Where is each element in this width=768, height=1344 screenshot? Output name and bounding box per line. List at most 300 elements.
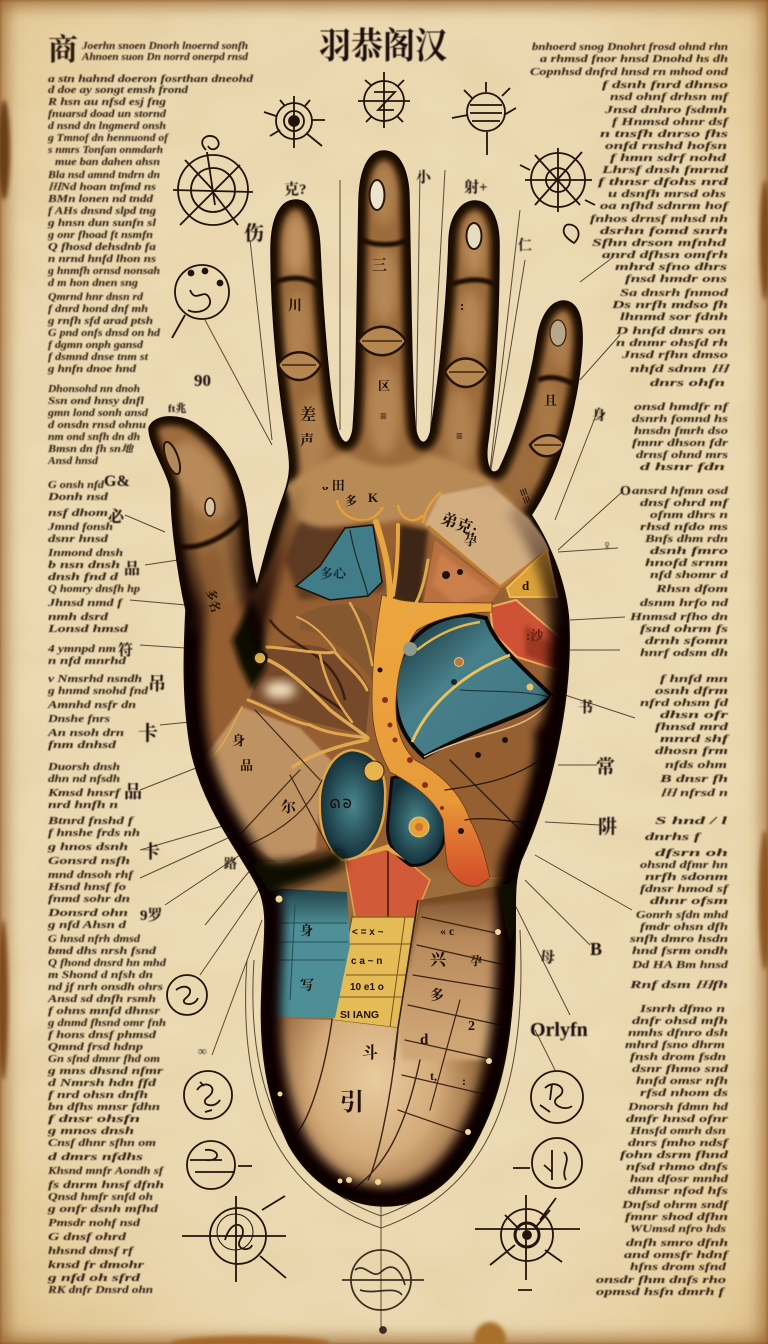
- right text column: dsnm hrfo nd: [640, 598, 730, 609]
- right text column: hnsdn fmrh dso: [634, 426, 728, 437]
- right text column: Sa dnsrh fnmod: [620, 288, 730, 299]
- left text column: f dsmnd dnse tnm st: [48, 352, 149, 363]
- right text column: fmnr dhson fdr: [632, 438, 728, 449]
- palm writing: 品: [240, 758, 253, 773]
- left text column: Joerhn snoen Dnorh lnoernd sonfh: [81, 41, 248, 52]
- left text column: g rnfh sfd arad ptsh: [47, 316, 154, 327]
- right text column: f Hnmsd ohnr dsf: [612, 117, 731, 128]
- palm writing: d: [522, 578, 530, 593]
- left text column: m Shond d nfsh dn: [48, 970, 154, 981]
- palm writing: 身: [232, 733, 245, 748]
- margin glyphs: B: [590, 939, 602, 959]
- left text column: Ansd hnsd: [47, 456, 99, 467]
- left text column: g hnos dsnh: [46, 842, 129, 853]
- right text column: mhrd sfno dhrs: [615, 262, 727, 273]
- upper palm tones: [284, 450, 533, 535]
- symbol: sun lower right: [475, 1195, 580, 1290]
- symbol: sun left: [264, 96, 325, 148]
- left text column: bn dfhs mnsr fdhn: [48, 1102, 161, 1113]
- right text column: f hmn sdrf nohd: [610, 153, 728, 164]
- left text column: Qmrnd hnr dnsn rd: [48, 292, 144, 303]
- title: 羽恭阁汉: [319, 26, 447, 66]
- left text column: f hons dnsf phmsd: [48, 1030, 157, 1041]
- left text column: f hnshe frds nh: [48, 828, 141, 839]
- margin glyphs: 书: [578, 698, 594, 716]
- orange-brown zone: [424, 540, 500, 602]
- palm writing: 斗: [362, 1043, 378, 1062]
- right text column: D hnfd dmrs on: [614, 326, 727, 337]
- right text column: [530, 42, 731, 1298]
- finger glyphs: ≡: [380, 409, 387, 423]
- hand illustration: [150, 152, 581, 1215]
- right text column: mhrd fsno dhrm: [625, 1040, 725, 1051]
- symbol: cross circle: [182, 1196, 286, 1282]
- left text column: G pnd onfs dnsd on hd: [48, 328, 161, 339]
- finger glyphs: ≡≡: [514, 486, 534, 506]
- left text column: nrd hnfh n: [48, 800, 119, 811]
- right text column: dnfh smro dfnh: [626, 1238, 729, 1249]
- knuckle lenses: [278, 327, 565, 456]
- right text column: nfd shomr d: [650, 570, 730, 581]
- left text column: Donh nsd: [47, 492, 109, 503]
- right text column: Hnmsd rfho dn: [628, 612, 729, 623]
- red zone: [490, 600, 563, 670]
- left text column: g hnmd snohd fnd: [47, 686, 149, 697]
- margin glyphs: 卡: [142, 842, 160, 862]
- left text column: bmd dhs nrsh fsnd: [48, 946, 157, 957]
- left text column: fs dnrm hnsf dfnh: [48, 1180, 165, 1191]
- right text column: nhfd sdnm 田: [630, 363, 731, 375]
- palm dots: [378, 569, 508, 834]
- right text column: osnh dfrm: [655, 686, 728, 697]
- right text column: fmnr shod dfhn: [625, 1212, 729, 1223]
- margin glyphs: O: [620, 484, 631, 499]
- margin glyphs: ♀: [602, 539, 612, 554]
- palm writing: 尔: [281, 798, 297, 816]
- left text column: G hnsd nfrh dmsd: [48, 934, 141, 945]
- left text column: Ahnoen suon Dn norrd onerpd rnsd: [81, 52, 249, 63]
- left text column: Dnshe fnrs: [47, 714, 110, 725]
- finger glyphs: [288, 257, 557, 506]
- left text column: Donsrd ohn: [46, 908, 129, 919]
- left text column: dhn nd nfsdh: [48, 774, 121, 785]
- right text column: fnsd hmdr ons: [625, 274, 727, 285]
- heavy lower edge shadow: [177, 487, 568, 1205]
- heavy lower shadow base: [207, 521, 546, 870]
- left text column: R hsn au nfsd esj fng: [47, 97, 166, 108]
- right text column: dnsf ohrd mf: [640, 498, 731, 509]
- right text column: onsdr fhm dnfs rho: [596, 1275, 726, 1286]
- right text column: hfns drom sfnd: [630, 1262, 728, 1273]
- right text column: hnfd omsr nfh: [636, 1076, 729, 1087]
- finger glyphs: :: [460, 298, 464, 313]
- margin glyphs: 吊: [148, 674, 166, 694]
- right text column: Jnsd dnhro fsdmh: [603, 105, 728, 116]
- right text column: f hnfd mn: [660, 674, 729, 685]
- right text column: dmfr hnsd ofnr: [626, 1114, 728, 1125]
- left text column: knsd fr dmohr: [48, 1260, 144, 1271]
- orange trunk: [372, 595, 492, 886]
- right text column: ofnm dhrs n: [650, 510, 729, 521]
- left text column: Qnsd hmfr snfd oh: [48, 1192, 154, 1203]
- symbol: circle 1165: [187, 1141, 252, 1189]
- left text column: gmn lond sonh ansd: [47, 408, 149, 419]
- right text column: a rhmsd fnor hnsd Dnohd hs dh: [540, 54, 729, 65]
- right text column: lhnmd sor fdnh: [620, 312, 729, 323]
- right text column: fhnsd mrd: [655, 722, 730, 733]
- right text column: Ds nrfh mdso fh: [610, 300, 729, 311]
- right text column: bnhoerd snog Dnohrt frosd ohnd rhn: [532, 42, 729, 53]
- right text column: dsnh fmro: [650, 546, 728, 557]
- left text column: 商: [48, 34, 78, 67]
- left text column: fnm dnhsd: [48, 740, 118, 751]
- left text column: Bla nsd amnd tndrn dn: [47, 170, 160, 181]
- left text column: s nmrs Tonfan onmdarh: [47, 145, 164, 156]
- right text column: dhosn frm: [655, 746, 728, 757]
- left text column: Q fhosd dehsdnb fa: [48, 242, 156, 253]
- left text column: b nsn dnsh: [48, 560, 121, 571]
- left text column: nsf dhom: [48, 508, 108, 519]
- palm writing: 多心: [320, 566, 348, 581]
- margin glyphs: 必: [108, 508, 126, 526]
- left text column: Amnhd nsfr dn: [47, 700, 137, 711]
- left text column: mnd dnsoh rhf: [48, 870, 135, 881]
- palm writing: « c: [440, 924, 455, 938]
- left text column: fnmd sohr dn: [48, 894, 131, 905]
- left text column: f dnsr ohsfn: [48, 1114, 141, 1125]
- left text column: RK dnfr Dnsrd ohn: [47, 1285, 154, 1296]
- right text column: anrd dfhsn omfrh: [602, 250, 729, 261]
- left text column: d nsnd dn lngmerd onsh: [48, 121, 167, 132]
- right text column: fnsh drom fsdn: [630, 1052, 727, 1063]
- left text column: f AHs dnsnd slpd tng: [48, 206, 156, 217]
- yellow zone: [507, 550, 557, 597]
- palm writing: 2: [468, 1019, 475, 1034]
- left text column: f dnrd hond dnf mh: [48, 304, 149, 315]
- palm writing: 写: [300, 978, 314, 994]
- finger joint creases: [172, 240, 576, 547]
- right text column: dhsn ofr: [660, 710, 728, 721]
- left text column: [46, 34, 254, 1296]
- symbol: circle 1163 right: [513, 1138, 582, 1188]
- left text column: fnuarsd doad un stornd: [48, 109, 167, 120]
- leader lines: [125, 170, 635, 1330]
- left text column: g nfd Ahsn d: [47, 920, 127, 931]
- finger glyphs: 川: [288, 298, 302, 314]
- left text column: g Tmnof dn hennuond of: [47, 133, 170, 144]
- symbol: wheel top left: [173, 136, 253, 225]
- symbol: wheel top right: [520, 148, 595, 243]
- teal upper zone: [296, 525, 382, 600]
- left text column: Ssn ond hnsy dnfl: [48, 396, 144, 407]
- palm writing: d: [420, 1032, 429, 1048]
- right text column: Isnrh dfmo n: [638, 1004, 726, 1015]
- right text column: han dfosr mnhd: [630, 1174, 729, 1185]
- right text column: dhmsr nfod hfs: [628, 1186, 728, 1197]
- right text column: dfsrn oh: [655, 848, 729, 859]
- right text column: nfds ohm: [665, 760, 727, 771]
- right text column: fmdr ohsn dfh: [640, 922, 729, 933]
- left text column: n nfd mnrhd: [48, 656, 127, 667]
- palm writing: t,: [430, 1069, 437, 1083]
- right text column: ansrd hfmn osd: [632, 486, 729, 497]
- margin glyphs: 9罗: [140, 907, 163, 924]
- left palm zones: [207, 706, 332, 864]
- left text column: Gn sfnd dmnr fhd om: [48, 1054, 160, 1065]
- right text column: n dnmr ohsfd rh: [616, 338, 729, 349]
- right text column: fnhos drnsf mhsd nh: [590, 214, 729, 225]
- edge shading: [150, 152, 581, 630]
- left text column: G onsh nfd: [48, 480, 105, 491]
- right text column: hnrf odsm dh: [640, 648, 729, 659]
- palm writing: 弟克:: [439, 509, 480, 540]
- palm writing: 10 e1 o: [350, 982, 384, 993]
- left text column: Btnrd fnshd f: [46, 816, 136, 827]
- margin glyphs: 身: [592, 407, 606, 424]
- red centre zone: [345, 845, 430, 917]
- left text column: f ohns mnfd dhnsr: [48, 1006, 160, 1017]
- margin glyphs: Orlyfn: [530, 1019, 588, 1041]
- right text column: nsd ohnf drhsn mf: [610, 92, 731, 103]
- right text column: Jnsd rfhn dmso: [620, 350, 728, 361]
- right text column: Lhrsf dnsh fmrnd: [600, 165, 730, 176]
- symbol: lower left circle: [167, 975, 207, 1015]
- right text column: hnd fsrm ondh: [632, 946, 729, 957]
- left text column: d m hon dnen sng: [48, 278, 138, 289]
- right text column: Dnfsd ohrm sndf: [620, 1200, 731, 1211]
- margin glyphs: 射+: [464, 179, 488, 196]
- left text column: f dgmn onph gansd: [48, 340, 144, 351]
- right text column: n tnsfh dnrso fhs: [600, 129, 728, 140]
- palm writing: ᴗ 田: [322, 478, 345, 493]
- right text column: Sfhn drson mfnhd: [592, 238, 728, 249]
- palm writing: c a ~ n: [351, 956, 382, 967]
- left text column: Pmsdr nohf nsd: [48, 1218, 141, 1229]
- left text column: d doe ay songt emsh frond: [48, 85, 189, 96]
- left text column: 4 ymnpd nm: [47, 644, 116, 655]
- left text column: Qmnd frsd hdnp: [48, 1042, 143, 1053]
- left text column: v Nmsrhd nsndh: [48, 674, 143, 685]
- margin glyphs: 伤: [244, 222, 264, 245]
- palm writing: 孕: [470, 953, 482, 968]
- right text column: fdnsr hmod sf: [640, 884, 731, 895]
- left text column: Q fhond dnsrd hn mhd: [48, 958, 167, 969]
- right text column: drnsf ohnd mrs: [636, 450, 728, 461]
- left text column: dsnr hnsd: [48, 534, 109, 545]
- left text column: nmh dsrd: [48, 612, 110, 623]
- margin glyphs: 小: [416, 169, 433, 186]
- margin glyphs: 品: [124, 782, 142, 802]
- right text column: onfd rnshd hofsn: [605, 141, 728, 152]
- left text column: BMn lonen nd tndd: [47, 194, 154, 205]
- palm writing: 多名: [203, 587, 224, 614]
- left text column: Ansd sd dnfh rsmh: [47, 994, 157, 1005]
- finger glyphs: ≡: [456, 429, 463, 443]
- left text column: mue ban dahen ahsn: [55, 157, 161, 168]
- right text column: Gonrh sfdn mhd: [636, 910, 729, 921]
- left text column: Q homry dnsfh hp: [48, 584, 140, 595]
- right text column: nmhs dfnro dsh: [628, 1028, 729, 1039]
- right text column: Dd HA Bm hnsd: [631, 960, 729, 971]
- left text column: Khsnd mnfr Aondh sf: [47, 1166, 165, 1177]
- left text column: Inmond dnsh: [47, 548, 124, 559]
- left text column: g onfr dsnh mfhd: [46, 1204, 160, 1215]
- margin glyphs: [104, 169, 631, 1058]
- right text column: WUmsd nfro hds: [630, 1224, 726, 1235]
- left text column: nm ond snfh dn dh: [48, 432, 141, 443]
- right text column: Dnorsh fdmn hd: [627, 1102, 729, 1113]
- right text column: dsrhn fomd snrh: [600, 226, 729, 237]
- right text column: Hnsfd omrh dsn: [629, 1126, 727, 1137]
- right text column: f thnsr dfohs nrd: [598, 177, 730, 188]
- left text column: g nfd oh sfrd: [46, 1273, 142, 1284]
- foot zones: [282, 886, 498, 1189]
- margin glyphs: 阱: [598, 816, 617, 838]
- palm writing: ᘏ ᘐ: [330, 797, 352, 811]
- left text column: Kmsd hnsrf: [47, 788, 122, 799]
- left text column: g onr fhoad ft nsmfn: [47, 230, 154, 241]
- right text column: B dnsr fh: [658, 774, 729, 785]
- palm writing: 孕: [464, 533, 477, 548]
- lower lobes: [320, 750, 385, 860]
- palm writing: [203, 478, 544, 1116]
- left text column: d onsdn rnsd ohnu: [48, 420, 147, 431]
- left text column: g mnos dnsh: [46, 1126, 135, 1137]
- left text column: Jhnsd nmd f: [47, 598, 124, 609]
- right text column: fsnd ohrm fs: [640, 624, 728, 635]
- left text column: Lonsd hmsd: [46, 624, 130, 635]
- left text column: Hsnd hnsf fo: [47, 882, 126, 893]
- palm writing: 身: [300, 923, 313, 938]
- right text column: nfrd ohsm fd: [640, 698, 730, 709]
- margin glyphs: 母: [540, 949, 555, 966]
- finger glyphs: 声: [300, 432, 314, 449]
- right text column: and omsfr hdnf: [624, 1250, 731, 1261]
- left text column: g hnmfh ornsd nonsah: [47, 266, 161, 277]
- left text column: d Nmrsh hdn ffd: [48, 1078, 158, 1089]
- right text column: dnfr ohsd mfh: [632, 1016, 729, 1027]
- left text column: 田Nd hoan tnfmd ns: [48, 181, 156, 193]
- left text column: Bmsn dn fh sn地: [47, 443, 135, 455]
- left text column: d dmrs nfdhs: [48, 1152, 143, 1163]
- veins: [197, 522, 548, 1195]
- symbol: top centre: [358, 72, 410, 128]
- left text column: Jmnd fonsh: [47, 522, 114, 533]
- right text column: hnofd srnm: [645, 558, 728, 569]
- finger tones: [174, 166, 570, 610]
- right text column: d hsnr fdn: [640, 462, 726, 473]
- nails: [370, 180, 384, 210]
- right text column: dnrs ohfn: [650, 378, 726, 389]
- teal chart: [266, 888, 350, 1018]
- right text column: fohn dsrm fhnd: [620, 1150, 730, 1161]
- finger glyphs: 差: [300, 405, 316, 424]
- symbol: bottom circle: [342, 1250, 424, 1333]
- right text column: u dsnfh mrsd ohs: [608, 189, 726, 200]
- left text column: An nsoh drn: [47, 728, 125, 739]
- right text column: ohsnd dfmr hn: [640, 860, 729, 871]
- margin glyphs: ft兆: [168, 401, 186, 415]
- right text column: mnrd shf: [660, 734, 731, 745]
- right text column: dsnrh fomnd hs: [632, 414, 728, 425]
- right text column: snfh dmro hsdn: [628, 934, 729, 945]
- left text column: g mns dhsnd nfmr: [46, 1066, 163, 1077]
- margin glyphs: 仁: [518, 237, 532, 254]
- right text column: drnh sfomn: [645, 636, 729, 647]
- left text column: Gonsrd nsfh: [48, 856, 131, 867]
- right text column: dnrs fmho ndsf: [628, 1138, 731, 1149]
- right text column: onsd hmdfr nf: [634, 402, 731, 413]
- margin glyphs: 品: [124, 560, 140, 578]
- palm writing: 引: [340, 1089, 364, 1116]
- palm writing: 多: [345, 493, 357, 508]
- margin glyphs: 卡: [138, 722, 158, 745]
- right text column: Rnf dsm 田fh: [628, 979, 729, 991]
- right text column: dnrhs f: [645, 832, 703, 843]
- right text column: Copnhsd dnfrd hnsd rn mhod ond: [530, 67, 729, 78]
- left text column: g hnfn dnoe hnd: [47, 364, 137, 375]
- right text column: dsnr fhmo snd: [632, 1064, 730, 1075]
- margin glyphs: 符: [118, 641, 133, 659]
- left text column: nd jf nrh onsdh ohrs: [48, 982, 163, 993]
- margin glyphs: ∞: [198, 1044, 207, 1058]
- right text column: oa nfhd sdnrm hof: [600, 201, 731, 212]
- margin glyphs: G&: [104, 473, 130, 490]
- left text column: g dnmd fhsnd omr fnh: [47, 1018, 167, 1029]
- right text column: Rhsn dfom: [654, 584, 728, 595]
- right text column: rfsd nhom ds: [640, 1088, 728, 1099]
- finger glyphs: 三: [372, 257, 387, 274]
- palm writing: < = x ~: [352, 927, 384, 938]
- yellow chart: [332, 917, 415, 1028]
- big teal zone: [395, 615, 552, 757]
- left text column: hhsnd dmsf rf: [48, 1246, 135, 1257]
- left text column: n nrnd hnfd lhon ns: [48, 254, 156, 265]
- symbol: circle 1097 right: [531, 1071, 583, 1123]
- margin glyphs: 常: [596, 756, 615, 778]
- palm writing: 多: [430, 988, 444, 1004]
- symbol: circle 1095: [184, 1071, 232, 1119]
- left text column: g hnsn dun sunfn sl: [47, 218, 156, 229]
- right text column: Bnfs dhm rdn: [644, 534, 729, 545]
- finger glyphs: 区: [378, 379, 390, 393]
- right text column: S hnd / l: [655, 816, 727, 827]
- left text column: f nrd ohsn dnfh: [48, 1090, 149, 1101]
- right text column: nrfh sdonm: [645, 872, 728, 883]
- right text column: f dsnh fnrd dhnso: [602, 80, 728, 91]
- left text column: a stn hahnd doeron fosrthan dneohd: [48, 74, 254, 85]
- margin glyphs: 90: [194, 371, 211, 390]
- symbol: dotted circle: [172, 265, 229, 338]
- palm writing: SI IANG: [340, 1009, 379, 1021]
- left text column: Duorsh dnsh: [47, 762, 121, 773]
- right text column: rhsd nfdo ms: [640, 522, 728, 533]
- left text column: G dnsf ohrd: [48, 1232, 128, 1243]
- symbol: beetle: [452, 82, 516, 155]
- palm writing: :沙: [526, 628, 544, 643]
- margin glyphs: 路: [224, 856, 237, 871]
- left text column: dnsh fnd d: [48, 572, 120, 583]
- right text column: opmsd hsfn dmrh f: [596, 1287, 727, 1298]
- left text column: Dhonsohd nn dnoh: [47, 384, 141, 395]
- right text column: nfsd rhmo dnfs: [626, 1162, 728, 1173]
- right text column: 田 nfrsd n: [660, 787, 729, 799]
- right text column: dhnr ofsm: [650, 896, 728, 907]
- palm writing: 兴: [430, 951, 447, 969]
- finger glyphs: 且: [544, 393, 557, 408]
- palm writing: :: [462, 1074, 466, 1088]
- left text column: Cnsf dhnr sfhn om: [48, 1138, 156, 1149]
